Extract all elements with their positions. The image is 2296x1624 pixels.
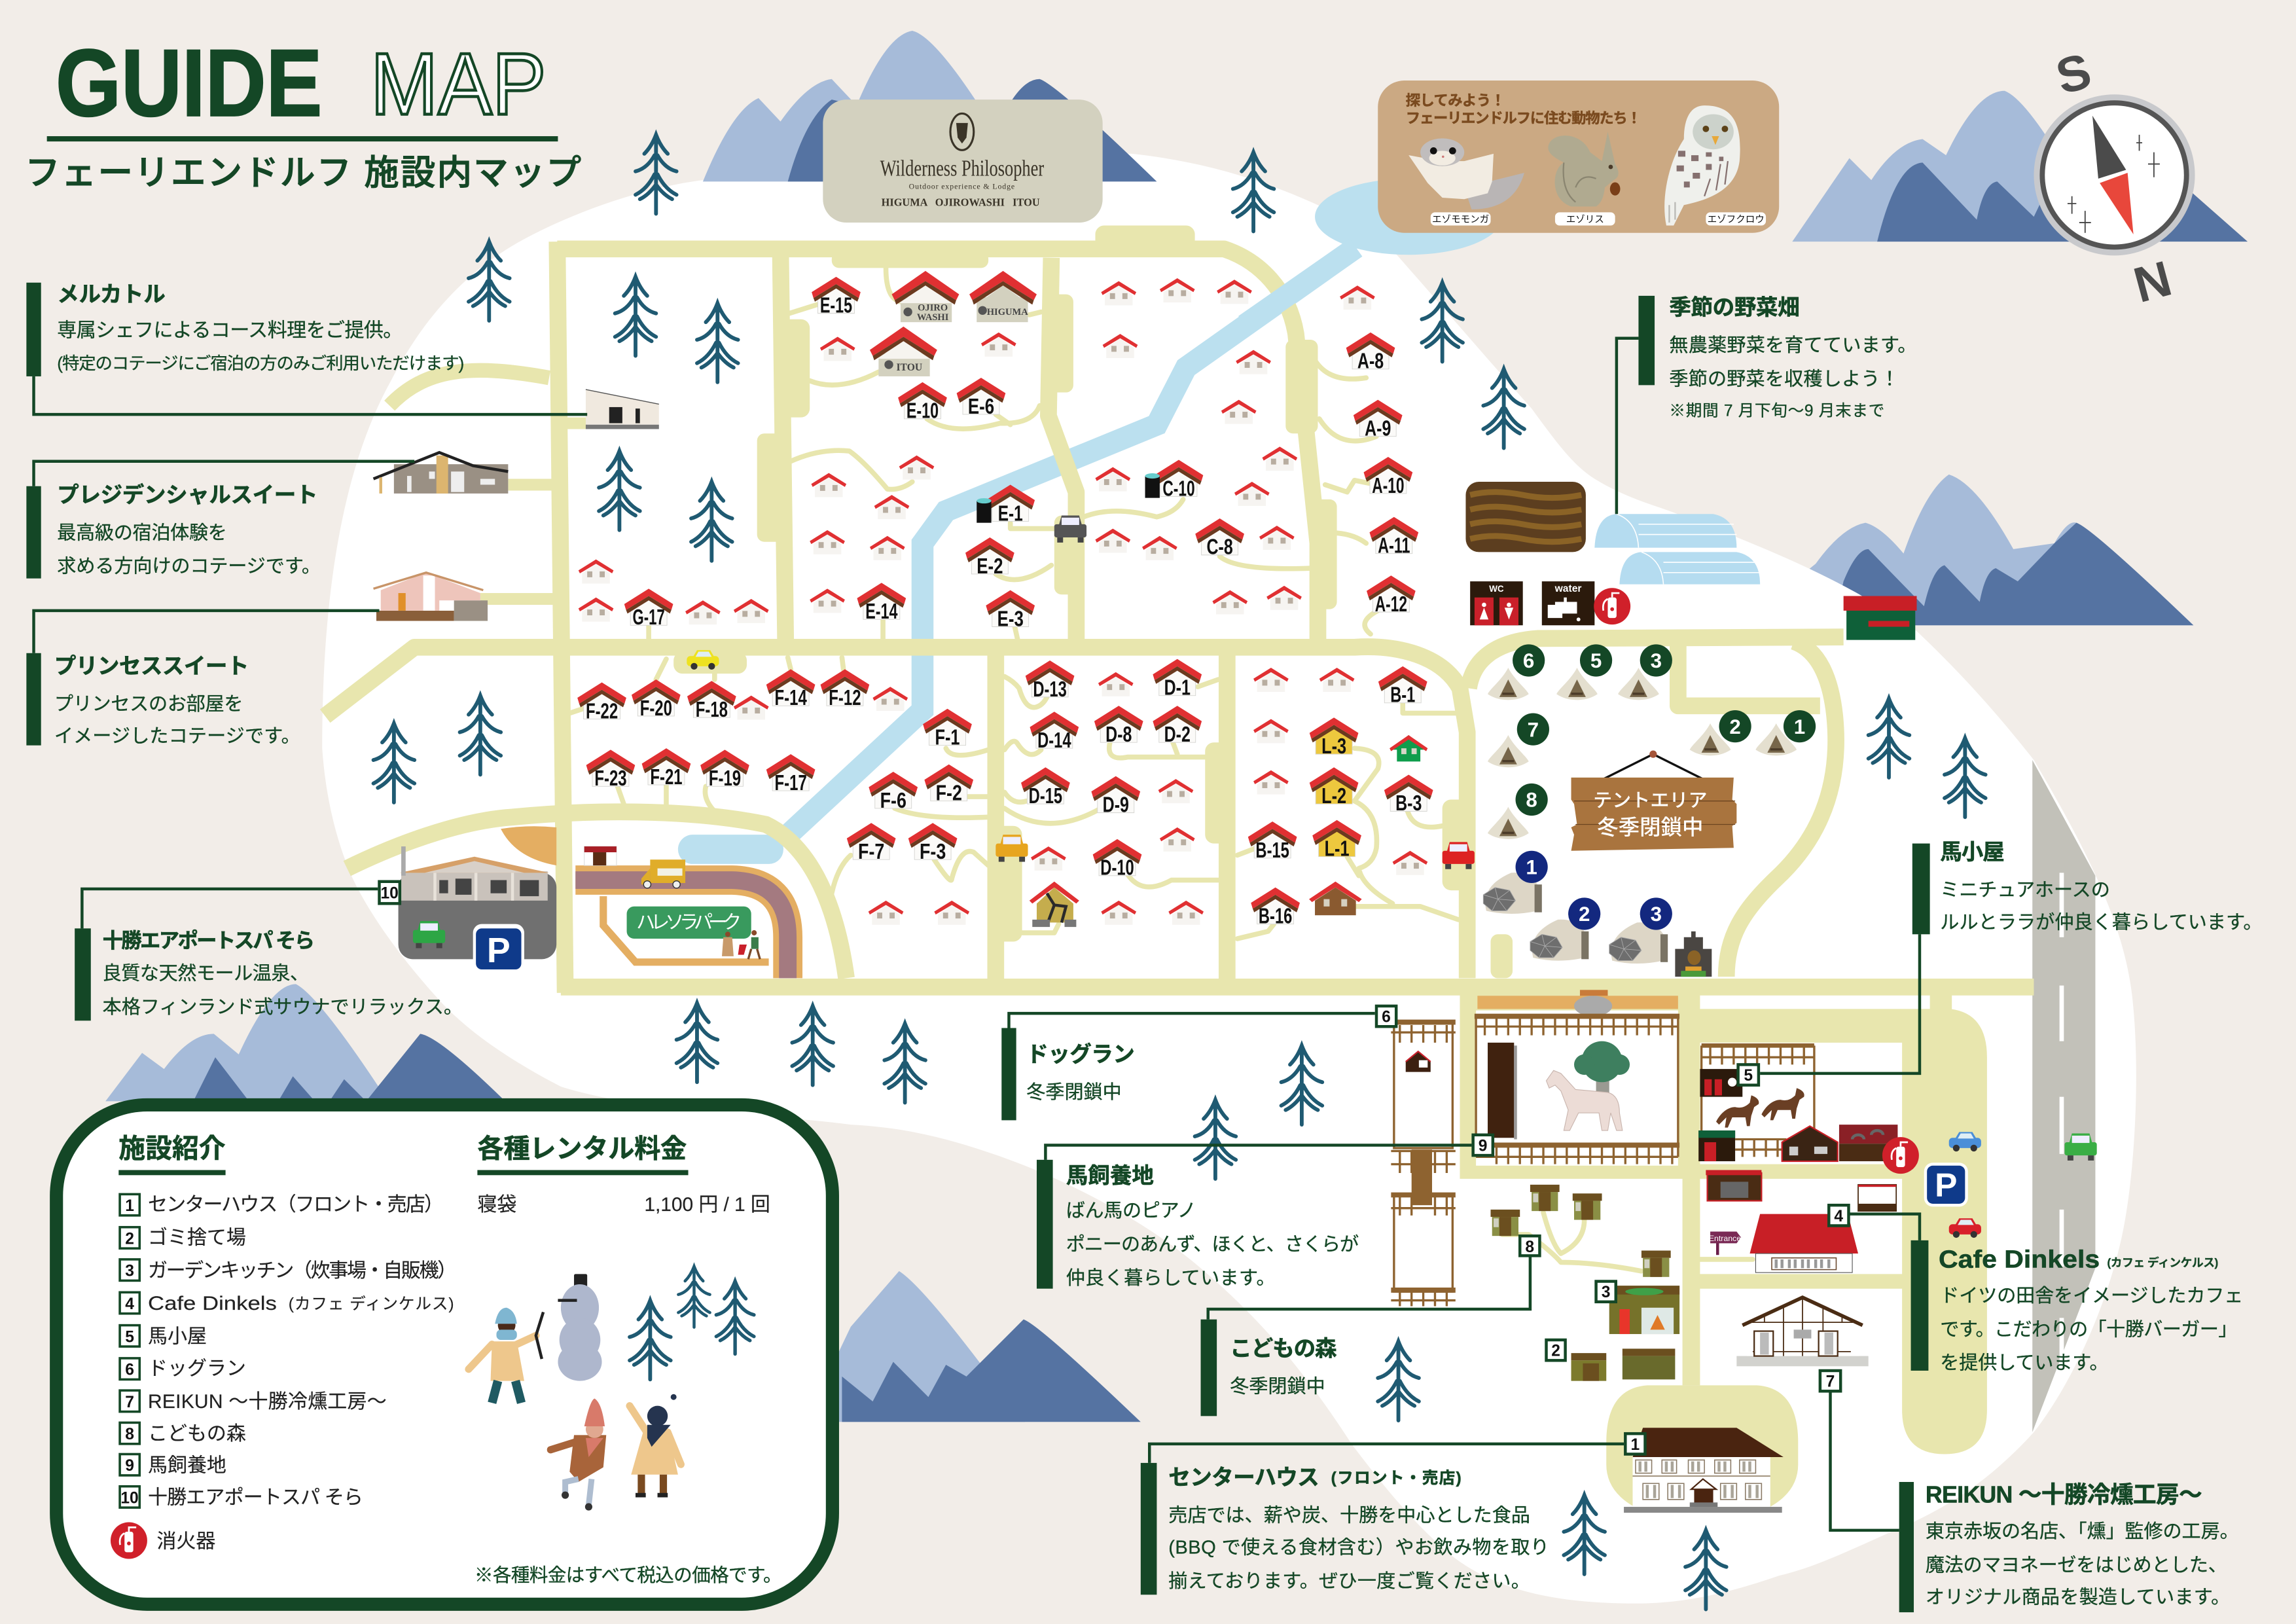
tent area sign text: テントエリア xyxy=(1593,791,1708,812)
dark cottage xyxy=(1782,1126,1838,1161)
Ojiro Washi lodge: OJIRO xyxy=(918,302,948,313)
labeled cottages: B-16 xyxy=(1259,905,1292,929)
callout: Presidential Suite: プレジデンシャルスイート xyxy=(57,482,318,507)
parking sign east xyxy=(1924,1163,1968,1206)
brown cottage xyxy=(1309,882,1362,915)
legend panel xyxy=(56,1105,833,1604)
callout: center house: 売店では、薪や炭、十勝を中心とした食品 xyxy=(1168,1504,1530,1526)
labeled cottages: E-14 xyxy=(865,600,898,624)
mountains: bottom left xyxy=(105,984,505,1101)
yellow cottages L-1 to L-3: L-3 xyxy=(1321,734,1346,759)
tent numbers: 7 xyxy=(1528,718,1539,741)
facility list numbers: 6 xyxy=(125,1362,134,1379)
tent numbers: 5 xyxy=(1590,649,1602,672)
green roof hut xyxy=(1698,1130,1735,1161)
labeled cottages: C-10 xyxy=(1162,477,1195,501)
labeled cottages: D-9 xyxy=(1103,793,1129,817)
tent area sign text: 冬季閉鎖中 xyxy=(1597,816,1703,839)
facility list numbers: 2 xyxy=(125,1230,134,1248)
labeled cottages: D-10 xyxy=(1100,856,1134,880)
compass xyxy=(2034,43,2195,314)
callout: REIKUN: オリジナル商品を製造しています。 xyxy=(1926,1587,2230,1608)
title: GUIDE MAP: GUIDE xyxy=(56,29,322,136)
dome numbers: 2 xyxy=(1579,903,1590,926)
vegetable field xyxy=(1465,482,1586,552)
callout: vegetable field xyxy=(1638,295,1917,420)
title: GUIDE MAP xyxy=(56,29,547,136)
labeled cottages: E-2 xyxy=(977,554,1003,579)
snowman xyxy=(558,1274,602,1381)
entrance sign xyxy=(1709,1231,1741,1255)
water: water xyxy=(1554,583,1582,594)
Halesora park track xyxy=(575,880,788,978)
labeled cottages: E-1 xyxy=(998,501,1023,526)
horse pasture xyxy=(1475,990,1679,1164)
child with stick xyxy=(469,1308,543,1403)
logo panel: Outdoor experience & Lodge xyxy=(909,182,1015,191)
labeled cottages: D-1 xyxy=(1164,676,1191,700)
animal labels: エゾフクロウ xyxy=(1708,214,1765,225)
animal labels xyxy=(1431,212,1766,226)
parking sign xyxy=(473,924,524,972)
facility list xyxy=(148,1194,457,1509)
tax note: ※各種料金はすべて税込の価格です。 xyxy=(475,1565,782,1586)
facility list: Cafe Dinkels xyxy=(148,1293,277,1314)
garden kitchen xyxy=(1609,1286,1679,1334)
title: GUIDE MAP: MAP xyxy=(370,35,547,133)
callout: horse pasture: ばん馬のピアノ xyxy=(1066,1200,1196,1221)
stove xyxy=(1675,931,1712,977)
logo panel: Wilderness Philosopher xyxy=(880,156,1045,181)
labeled cottages: F-19 xyxy=(709,767,741,791)
callout: dog run: 冬季閉鎖中 xyxy=(1026,1081,1122,1103)
shop xyxy=(1844,596,1917,640)
callout: children's forest: 冬季閉鎖中 xyxy=(1230,1376,1325,1398)
number box labels: 9 xyxy=(1479,1137,1487,1155)
small unlabeled cottages xyxy=(579,278,1427,925)
callout: horse pasture: ポニーのあんず、ほくと、さくらが xyxy=(1066,1234,1359,1255)
tent numbers: 6 xyxy=(1523,649,1534,672)
labeled cottages: A-8 xyxy=(1357,350,1384,374)
trash huts xyxy=(1571,1348,1675,1381)
labeled cottages: F-18 xyxy=(696,698,728,722)
labeled cottages: F-20 xyxy=(640,696,672,721)
red hut xyxy=(584,846,617,865)
labeled cottages: G-17 xyxy=(633,605,665,630)
Higuma lodge xyxy=(969,271,1037,322)
labeled cottages: F-3 xyxy=(920,840,946,864)
mountains: top right behind compass xyxy=(1792,91,2248,242)
callout: center house: 揃えております。ぜひ一度ご覧ください。 xyxy=(1168,1570,1530,1592)
callout: children's forest xyxy=(1201,1320,1337,1416)
domes xyxy=(1483,873,1668,964)
callout: Princess Suite: イメージしたコテージです。 xyxy=(54,726,300,747)
rental item xyxy=(477,1194,770,1216)
animals heading: 探してみよう！ xyxy=(1406,92,1505,109)
labeled cottages: F-14 xyxy=(775,686,807,710)
greenhouses xyxy=(1594,514,1760,585)
labeled cottages: E-15 xyxy=(820,294,852,318)
facility list: 十勝エアポートスパ そら xyxy=(148,1487,363,1509)
tent numbers: 3 xyxy=(1651,649,1662,672)
parking sign east: P xyxy=(1935,1166,1957,1204)
callout: horse stable: ルルとララが仲良く暮らしています。 xyxy=(1940,911,2262,933)
Itou lodge xyxy=(870,327,937,376)
labeled cottages: A-12 xyxy=(1375,592,1407,617)
callout: Mercato: (特定のコテージにご宿泊の方のみご利用いただけます) xyxy=(57,353,464,373)
callout: Princess Suite xyxy=(26,653,300,747)
orange patch xyxy=(501,826,556,865)
food truck xyxy=(641,859,685,888)
labeled cottages: D-14 xyxy=(1037,729,1071,753)
heading: rental fees: 各種レンタル料金 xyxy=(477,1134,687,1163)
labeled cottages: D-2 xyxy=(1164,723,1191,747)
callout: Princess Suite: プリンセスのお部屋を xyxy=(54,693,243,715)
presidential suite building xyxy=(374,452,508,494)
facility list numbers: 8 xyxy=(125,1426,134,1443)
facility list: ガーデンキッチン（炊事場・自販機） xyxy=(148,1260,457,1282)
callout: Tokachi Airport Spa Sora: 本格フィンランド式サウナでリラックス。 xyxy=(103,996,463,1018)
children's forest huts xyxy=(1490,1185,1671,1277)
vehicles xyxy=(687,515,2097,1238)
number box labels xyxy=(380,884,1843,1454)
callout: Cafe Dinkels: Cafe Dinkels xyxy=(1939,1246,2100,1273)
callout: center house: (BBQ で使える食材含む）やお飲み物を取り xyxy=(1168,1537,1549,1559)
title rule xyxy=(47,136,558,141)
callout: Princess Suite: プリンセススイート xyxy=(54,654,249,679)
deer lodge xyxy=(1030,882,1079,927)
callout: vegetable field: 季節の野菜を収穫しよう！ xyxy=(1669,368,1899,389)
fire extinguisher near BBQ xyxy=(1882,1137,1919,1174)
callout: horse pasture xyxy=(1037,1160,1359,1289)
flying squirrel xyxy=(1408,138,1524,209)
WC: WC xyxy=(1489,584,1504,594)
labeled cottages: F-7 xyxy=(858,840,884,864)
tent numbers: 8 xyxy=(1526,789,1537,812)
facility list: こどもの森 xyxy=(148,1423,246,1445)
ponies xyxy=(1716,1088,1804,1128)
callout: Tokachi Airport Spa Sora xyxy=(75,928,463,1020)
callout: Mercato: メルカトル xyxy=(57,283,166,307)
river and lakes xyxy=(678,179,1502,864)
road network xyxy=(325,226,2034,1510)
spa green car xyxy=(413,921,445,948)
number box labels: 1 xyxy=(1630,1436,1640,1454)
Ojiro Washi lodge xyxy=(891,271,959,323)
labeled cottages: F-12 xyxy=(829,686,861,710)
callout: Tokachi Airport Spa Sora: 十勝エアポートスパ そら xyxy=(103,929,315,952)
Cafe Dinkels building xyxy=(1749,1214,1858,1272)
labeled cottages: A-10 xyxy=(1372,474,1405,498)
mountains: right middle xyxy=(1740,475,2193,625)
fire extinguisher near water xyxy=(1594,588,1630,624)
green cottage xyxy=(1390,735,1427,761)
labeled cottages: F-6 xyxy=(880,789,906,813)
animals panel xyxy=(1378,81,1779,233)
facility list: 馬小屋 xyxy=(148,1326,207,1347)
labeled cottages: F-21 xyxy=(650,765,683,789)
WC xyxy=(1470,581,1523,625)
number box labels: 5 xyxy=(1744,1067,1753,1085)
mountains: top center xyxy=(703,31,1157,181)
callout: vegetable field: 無農薬野菜を育てています。 xyxy=(1669,334,1917,356)
leader lines xyxy=(34,338,1920,1530)
labeled cottages: F-17 xyxy=(775,771,807,795)
BBQ area xyxy=(1839,1125,1897,1161)
callout: dog run xyxy=(1001,1028,1135,1120)
compass N: N xyxy=(2128,251,2178,314)
labeled cottages: D-13 xyxy=(1033,677,1067,702)
tent numbers: 2 xyxy=(1729,715,1741,738)
tent numbers: 1 xyxy=(1794,715,1805,738)
red shed xyxy=(1706,1170,1761,1200)
barn hut xyxy=(1700,1069,1742,1097)
callout: center house: (フロント・売店) xyxy=(1331,1469,1462,1487)
number box labels: 10 xyxy=(380,884,399,902)
callout: center house: センターハウス xyxy=(1168,1466,1319,1490)
labeled cottages: F-1 xyxy=(935,726,960,750)
panel trees xyxy=(630,1267,754,1379)
facility list numbers: 4 xyxy=(125,1295,134,1313)
callout: REIKUN: 東京赤坂の名店、「燻」監修の工房。 xyxy=(1926,1521,2239,1542)
callout: Tokachi Airport Spa Sora: 良質な天然モール温泉、 xyxy=(103,963,309,984)
parking sign: P xyxy=(487,931,511,970)
callout: center house xyxy=(1141,1463,1549,1595)
dome numbers: 1 xyxy=(1526,856,1537,879)
park sign xyxy=(627,907,751,939)
park people xyxy=(722,930,760,959)
grey highway xyxy=(2032,760,2095,1432)
park sign: ハレソラパーク xyxy=(636,912,742,933)
rental item: 寝袋 xyxy=(477,1194,516,1216)
oil drums xyxy=(977,473,1160,523)
dog house xyxy=(1406,1051,1431,1072)
number boxes xyxy=(379,882,1848,1454)
dog run xyxy=(1391,1022,1456,1307)
dome numbers: 3 xyxy=(1651,903,1662,926)
facility list number boxes xyxy=(120,1194,139,1507)
number box labels: 6 xyxy=(1382,1009,1391,1026)
yellow cottages L-1 to L-3: L-1 xyxy=(1325,837,1350,861)
Higuma lodge: HIGUMA xyxy=(987,307,1028,317)
tents xyxy=(1488,668,1797,839)
callout: Presidential Suite xyxy=(26,482,321,579)
compass S: S xyxy=(2051,43,2097,105)
facility list: ドッグラン xyxy=(148,1358,246,1380)
tent area sign xyxy=(1571,751,1736,851)
squirrel xyxy=(1548,132,1620,206)
labeled cottages: B-15 xyxy=(1255,839,1289,863)
labeled cottages: F-23 xyxy=(594,767,627,791)
spa Sora parking pad xyxy=(399,846,556,972)
animal labels: エゾリス xyxy=(1566,214,1604,225)
callout: Cafe Dinkels: です。こだわりの「十勝バーガー」 xyxy=(1940,1318,2237,1340)
facility list: センターハウス（フロント・売店） xyxy=(148,1194,444,1216)
labeled cottages: F-2 xyxy=(936,782,962,806)
facility list: REIKUN ～十勝冷燻工房～ xyxy=(148,1391,387,1413)
callout: REIKUN: 魔法のマヨネーゼをはじめとした、 xyxy=(1926,1554,2227,1576)
swing xyxy=(1858,1185,1896,1211)
pasture tree xyxy=(1574,1041,1630,1095)
callout: Mercato: 専属シェフによるコース料理をご提供。 xyxy=(57,320,403,342)
number box labels: 3 xyxy=(1602,1284,1610,1301)
callout: REIKUN: REIKUN ～十勝冷燻工房～ xyxy=(1926,1481,2202,1507)
facility list: 馬飼養地 xyxy=(148,1454,226,1476)
animals heading: フェーリエンドルフに住む動物たち！ xyxy=(1406,110,1641,126)
Itou lodge: ITOU xyxy=(896,362,922,373)
callout: horse pasture: 馬飼養地 xyxy=(1066,1164,1154,1189)
callout: Presidential Suite: 求める方向けのコテージです。 xyxy=(57,556,321,577)
water xyxy=(1542,581,1594,625)
labeled cottages: A-11 xyxy=(1378,534,1410,558)
labeled cottages xyxy=(577,277,1433,929)
REIKUN building xyxy=(1736,1297,1869,1366)
callout: Cafe Dinkels xyxy=(1911,1240,2243,1374)
number box labels: 4 xyxy=(1834,1208,1843,1225)
logo panel xyxy=(823,99,1103,223)
callout: horse stable xyxy=(1912,840,2262,934)
logo panel: HIGUMA OJIROWASHI ITOU xyxy=(882,196,1040,208)
Ojiro Washi lodge: WASHI xyxy=(917,312,949,323)
labeled cottages: E-10 xyxy=(906,399,939,424)
white horse xyxy=(1547,1070,1623,1130)
white map ground xyxy=(322,152,2136,1604)
facility list numbers: 7 xyxy=(125,1394,134,1411)
number box labels: 2 xyxy=(1551,1343,1560,1360)
Mercato building xyxy=(586,389,659,429)
animals heading xyxy=(1406,92,1641,126)
labeled cottages: A-9 xyxy=(1365,417,1391,441)
callout: Mercato xyxy=(26,283,464,376)
child in navy hat xyxy=(630,1394,681,1495)
labeled cottages: E-6 xyxy=(968,395,994,419)
trees xyxy=(374,135,1986,1610)
callout: REIKUN xyxy=(1899,1481,2239,1612)
callout: Cafe Dinkels: を提供しています。 xyxy=(1940,1352,2109,1374)
spa building xyxy=(400,846,549,901)
labeled cottages: D-8 xyxy=(1105,723,1132,747)
animal labels: エゾモモンガ xyxy=(1432,214,1489,225)
dome numbers xyxy=(1516,851,1672,930)
callout: dog run: ドッグラン xyxy=(1026,1042,1135,1067)
callout: vegetable field: 季節の野菜畑 xyxy=(1669,295,1800,320)
number box labels: 8 xyxy=(1525,1238,1534,1256)
labeled cottages: F-22 xyxy=(586,699,618,723)
callout: vegetable field: ※期間 7 月下旬～9 月末まで xyxy=(1669,401,1884,420)
rental item: 1,100 円 / 1 回 xyxy=(644,1194,770,1216)
callout: Cafe Dinkels: ドイツの田舎をイメージしたカフェ xyxy=(1940,1286,2243,1307)
facility list numbers: 1 xyxy=(125,1197,134,1215)
labeled cottages: B-3 xyxy=(1395,791,1422,816)
callout: horse pasture: 仲良く暮らしています。 xyxy=(1066,1267,1276,1289)
labeled cottages: C-8 xyxy=(1206,535,1233,560)
callout: children's forest: こどもの森 xyxy=(1230,1337,1337,1362)
dog run bridge xyxy=(1412,1149,1432,1205)
callout: horse stable: 馬小屋 xyxy=(1940,840,2005,865)
facility list: ゴミ捨て場 xyxy=(148,1227,246,1248)
center house xyxy=(1624,1428,1784,1513)
fire extinguisher legend: 消火器 xyxy=(156,1531,215,1553)
facility list: (カフェ ディンケルス) xyxy=(289,1295,454,1313)
entrance sign: Entrance xyxy=(1709,1234,1741,1243)
callout: Cafe Dinkels: (カフェ ディンケルス) xyxy=(2107,1255,2218,1269)
labeled cottages: D-15 xyxy=(1029,784,1062,808)
heading: facilities: 施設紹介 xyxy=(118,1133,226,1163)
mountains: bottom center xyxy=(806,1271,1141,1422)
tent numbers xyxy=(1513,644,1816,816)
subtitle: フェーリエンドルフ 施設内マップ xyxy=(25,153,581,192)
facility list numbers: 10 xyxy=(120,1489,139,1507)
child in red hat xyxy=(550,1398,606,1511)
fire extinguisher legend xyxy=(111,1523,215,1559)
horse barn xyxy=(1698,1045,1968,1211)
callout: horse stable: ミニチュアホースの xyxy=(1940,880,2110,901)
facility list numbers xyxy=(120,1197,139,1507)
yellow cottages L-1 to L-3: L-2 xyxy=(1321,784,1346,808)
facility list numbers: 9 xyxy=(125,1457,134,1475)
number box labels: 7 xyxy=(1826,1373,1835,1391)
owl xyxy=(1664,105,1740,226)
facility list numbers: 3 xyxy=(125,1263,134,1280)
callout: Presidential Suite: 最高級の宿泊体験を xyxy=(57,522,227,543)
yellow cottages L-1 to L-3 xyxy=(1310,717,1361,861)
labeled cottages: B-1 xyxy=(1390,683,1415,708)
labeled cottages: E-3 xyxy=(997,607,1024,631)
facility list numbers: 5 xyxy=(125,1328,134,1346)
princess suite building xyxy=(374,573,488,621)
